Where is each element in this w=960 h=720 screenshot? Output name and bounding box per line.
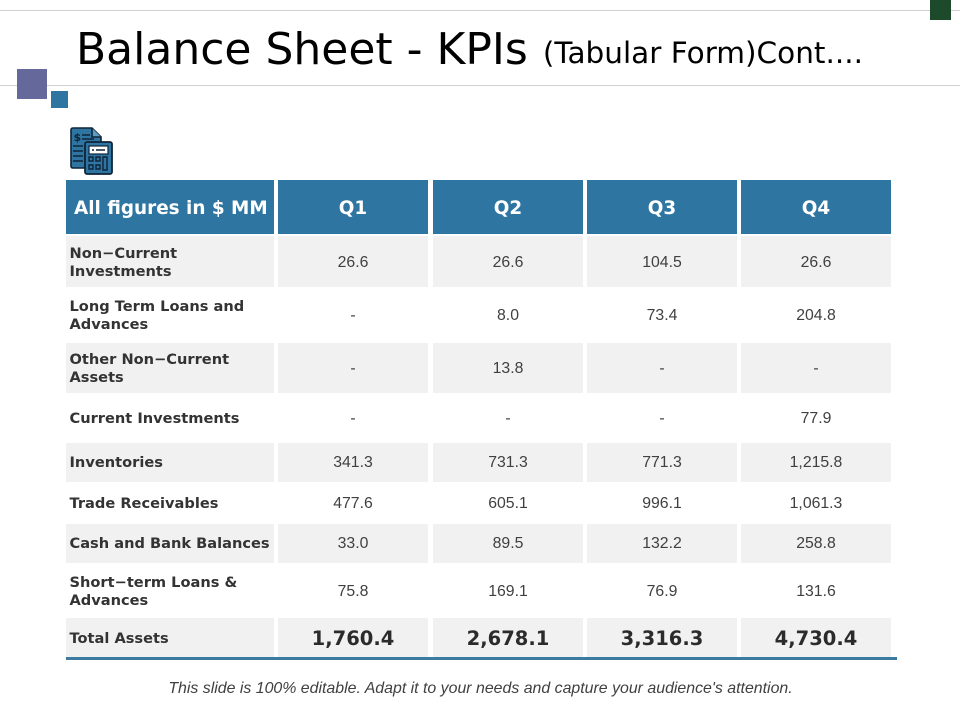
row: Current Investments: Current Investments	[70, 410, 239, 426]
row: Long Term Loans and Advances: -	[350, 307, 356, 324]
header row: Q1	[339, 198, 367, 219]
row: Long Term Loans and Advances: 204.8	[796, 307, 836, 324]
header row: Q4	[802, 198, 830, 219]
header row: Q2	[494, 198, 522, 219]
row: Current Investments: -	[505, 410, 511, 426]
row: Other Non-Current Assets: 13.8	[493, 360, 523, 377]
title: Balance Sheet - KPIs (Tabular Form)Cont....	[76, 24, 863, 75]
row: Short-term Loans & Advances: Short−term Loans &	[70, 574, 237, 591]
row: Trade Receivables	[70, 495, 842, 512]
row: Non-Current Investments: 26.6	[493, 254, 523, 270]
row: Other Non-Current Assets	[66, 343, 891, 393]
row: Long Term Loans and Advances: 73.4	[647, 307, 677, 324]
row: Cash and Bank Balances: 258.8	[796, 534, 836, 552]
row: Total Assets: 4,730.4	[775, 627, 857, 650]
row: Short-term Loans & Advances: 76.9	[647, 583, 677, 600]
row: Current Investments: -	[659, 410, 665, 426]
row: Total Assets: 2,678.1	[467, 627, 549, 650]
row: Short-term Loans & Advances	[70, 574, 836, 609]
row: Long Term Loans and Advances: Advances	[70, 316, 148, 333]
row: Long Term Loans and Advances	[70, 298, 836, 333]
row: Long Term Loans and Advances: Long Term Loans and	[70, 298, 244, 315]
row: Cash and Bank Balances: 89.5	[493, 534, 523, 552]
row: Other Non-Current Assets: -	[350, 360, 356, 377]
row: Cash and Bank Balances: Cash and Bank Balances	[70, 534, 270, 552]
row: Non-Current Investments: 104.5	[642, 254, 682, 270]
row: Cash and Bank Balances	[66, 524, 891, 563]
row: Current Investments	[70, 410, 831, 426]
row: Other Non-Current Assets: Assets	[70, 369, 124, 386]
row: Short-term Loans & Advances: 169.1	[488, 583, 528, 600]
row: Inventories: 771.3	[642, 454, 682, 470]
icon: invoice and calculator	[70, 127, 113, 175]
row: Total Assets	[66, 618, 891, 657]
row: Trade Receivables: 605.1	[488, 495, 528, 512]
row: Inventories: 1,215.8	[790, 454, 842, 470]
row: Total Assets: 3,316.3	[621, 627, 703, 650]
header row: Q3	[648, 198, 676, 219]
row: Cash and Bank Balances: 132.2	[642, 534, 682, 552]
row: Total Assets: 1,760.4	[312, 627, 394, 650]
row: Cash and Bank Balances: 33.0	[338, 534, 368, 552]
row: Short-term Loans & Advances: Advances	[70, 592, 148, 609]
row: Non-Current Investments: 26.6	[801, 254, 831, 270]
icon: invoice and calculator: $	[74, 131, 81, 144]
footer note: This slide is 100% editable. Adapt it to your needs and capture your audience's attention.	[168, 680, 793, 697]
row: Long Term Loans and Advances: 8.0	[497, 307, 519, 324]
row: Current Investments: 77.9	[801, 410, 831, 426]
row: Non-Current Investments: Investments	[70, 262, 172, 280]
row: Non-Current Investments: Non−Current	[70, 244, 177, 262]
row: Total Assets: Total Assets	[70, 630, 169, 646]
row: Other Non-Current Assets: -	[659, 360, 665, 377]
header row	[66, 180, 891, 234]
header row: All figures in $ MM	[74, 198, 268, 218]
row: Trade Receivables: Trade Receivables	[70, 495, 218, 512]
row: Inventories	[66, 443, 891, 482]
row: Inventories: Inventories	[70, 454, 163, 470]
row: Short-term Loans & Advances: 131.6	[796, 583, 836, 600]
row: Other Non-Current Assets: -	[813, 360, 819, 377]
decorative square: blue	[51, 91, 68, 108]
decorative square: dark green	[930, 0, 951, 20]
row: Short-term Loans & Advances: 75.8	[338, 583, 368, 600]
row: Other Non-Current Assets: Other Non−Current	[70, 351, 229, 368]
row: Non-Current Investments: 26.6	[338, 254, 368, 270]
decorative square: purple	[17, 69, 47, 99]
row: Inventories: 731.3	[488, 454, 528, 470]
row: Non-Current Investments	[66, 236, 891, 287]
row: Trade Receivables: 996.1	[642, 495, 682, 512]
row: Trade Receivables: 1,061.3	[790, 495, 842, 512]
row: Trade Receivables: 477.6	[333, 495, 373, 512]
row: Current Investments: -	[350, 410, 356, 426]
row: Inventories: 341.3	[333, 454, 373, 470]
